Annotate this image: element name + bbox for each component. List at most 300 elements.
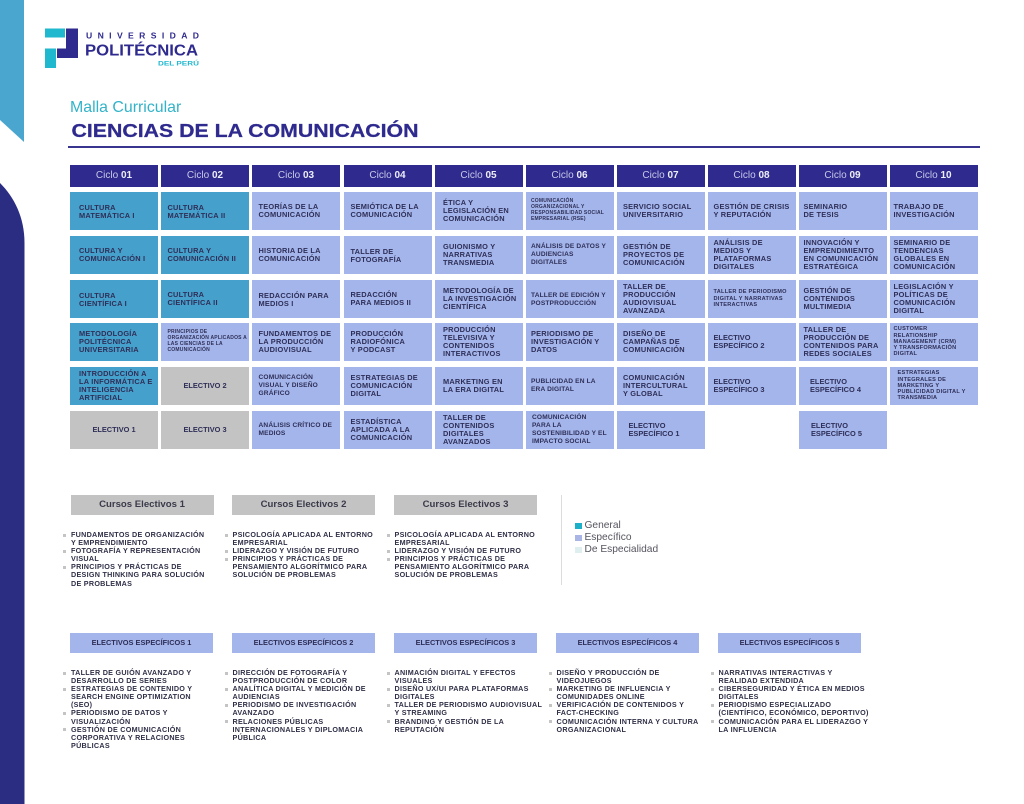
course: CRM: MANAGEMENT (CRM) bbox=[894, 339, 956, 345]
heading: Cursos Electivos 3 bbox=[394, 495, 537, 515]
heading: Cursos Electivos 3: Cursos Electivos 3 bbox=[423, 499, 508, 510]
course: CRM bbox=[890, 323, 978, 361]
course: Servicio Social Universitario: SERVICIO SOCIAL bbox=[623, 202, 691, 211]
course: Gestión de Crisis: GESTIÓN DE CRISIS bbox=[714, 202, 790, 211]
course: Trabajo de Investigación: TRABAJO DE bbox=[894, 202, 944, 211]
list: Electivos Específicos 5 bbox=[711, 668, 869, 734]
course: Análisis de Datos bbox=[526, 236, 614, 274]
course: Cultura y Comunicación II: COMUNICACIÓN II bbox=[168, 254, 236, 263]
course: Estrategias de Comunicación Digital: COMUNICACIÓN bbox=[350, 381, 412, 390]
course: Seminario de Tesis: DE TESIS bbox=[804, 210, 839, 219]
course: Cultura Matemática I: MATEMÁTICA I bbox=[79, 211, 135, 220]
course: Fundamentos de la Producción bbox=[252, 323, 340, 361]
course: Cultura Científica I bbox=[70, 280, 158, 318]
course: Marketing en la Era Digital bbox=[434, 367, 522, 405]
course: Fundamentos de la Producción: AUDIOVISUAL bbox=[258, 345, 312, 354]
heading: Cursos Electivos 1 bbox=[70, 495, 214, 515]
course: Ética y Legislación: ÉTICA Y bbox=[443, 198, 473, 207]
legend: General: General bbox=[584, 520, 621, 530]
course: Estadística Aplicada: APLICADA A LA bbox=[350, 425, 410, 434]
course: Gestión de Contenidos: MULTIMEDIA bbox=[804, 302, 852, 311]
list: Cursos Electivos 3: PSICOLOGÍA APLICADA AL ENTORNO bbox=[394, 530, 535, 539]
course: Redacción para Medios II: REDACCIÓN bbox=[350, 290, 397, 299]
course: Electivo Específico 1: ELECTIVO bbox=[628, 421, 665, 430]
decorative side band: navy bbox=[0, 183, 24, 804]
course: Electivo Específico 5: ESPECÍFICO 5 bbox=[811, 429, 862, 438]
course: Electivo Específico 2: ELECTIVO bbox=[714, 333, 750, 342]
course: Teorías de la Comunicación bbox=[252, 192, 340, 230]
course: Legislación y Políticas: DIGITAL bbox=[894, 306, 924, 315]
course: Introducción a la Informática: LA INFORMÁTICA E bbox=[79, 377, 153, 386]
course: Taller de Producción Audiovisual: PRODUCCIÓN bbox=[623, 290, 676, 299]
list: Electivos Específicos 1: GESTIÓN DE COMUNICACIÓN bbox=[71, 725, 181, 734]
course: Estadística Aplicada: ESTADÍSTICA bbox=[350, 417, 402, 426]
list: Cursos Electivos 2: LIDERAZGO Y VISIÓN DE FUTURO bbox=[232, 546, 359, 555]
course: Producción Radiofónica: RADIOFÓNICA bbox=[350, 337, 405, 346]
heading: Electivos Específicos 2: ELECTIVOS ESPECÍFICOS 2 bbox=[254, 638, 353, 647]
course: Semiótica de la Comunicación bbox=[344, 192, 432, 230]
header: Ciclo 01 bbox=[70, 165, 158, 186]
list: Cursos Electivos 3: PENSAMIENTO ALGORÍTMICO PARA bbox=[394, 562, 529, 571]
header: Ciclo 07 bbox=[616, 165, 704, 186]
list: Electivos Específicos 2: POSTPRODUCCIÓN DE COLOR bbox=[232, 676, 347, 685]
list: Electivos Específicos 4: VERIFICACIÓN DE CONTENIDOS Y bbox=[556, 700, 684, 709]
list: Electivos Específicos 1: PERIODISMO DE DATOS Y bbox=[71, 708, 168, 717]
course: Cultura y Comunicación I bbox=[70, 236, 158, 274]
course: Cultura Científica I: CIENTÍFICA I bbox=[79, 299, 127, 308]
header: Ciclo 09 bbox=[798, 165, 886, 186]
course: Cultura y Comunicación I: COMUNICACIÓN I bbox=[79, 254, 145, 263]
course: Taller de Fotografía: TALLER DE bbox=[350, 247, 393, 256]
course: Cultura Matemática II: CULTURA bbox=[168, 203, 204, 212]
course: Legislación y Políticas: COMUNICACIÓN bbox=[894, 298, 955, 307]
heading: Electivos Específicos 5 bbox=[718, 633, 861, 652]
list: Cursos Electivos 1 bbox=[63, 530, 205, 588]
course: Redacción para Medios I bbox=[252, 280, 340, 318]
course: Comunicación Organizacional y RSE: COMUNICACIÓN bbox=[531, 198, 573, 204]
header: Ciclo 06: Ciclo 06 bbox=[551, 170, 588, 181]
list: Electivos Específicos 5: NARRATIVAS INTERACTIVAS Y bbox=[718, 668, 833, 677]
list: Electivos Específicos 3: TALLER DE PERIODISMO AUDIOVISUAL bbox=[394, 700, 542, 709]
course: Comunicación Organizacional y RSE: RESPONSABILIDAD SOCIAL bbox=[531, 210, 604, 216]
course: Diseño de Campañas bbox=[616, 323, 704, 361]
course: Trabajo de Investigación bbox=[890, 192, 978, 230]
list: Electivos Específicos 5: CIBERSEGURIDAD Y ÉTICA EN MEDIOS bbox=[718, 684, 865, 693]
list: Electivos Específicos 1: VISUALIZACIÓN bbox=[71, 717, 130, 726]
course: Legislación y Políticas bbox=[890, 280, 978, 318]
course: Taller de Producción Audiovisual: AVANZADA bbox=[623, 306, 665, 315]
list: Cursos Electivos 2: EMPRESARIAL bbox=[232, 538, 288, 547]
list: Electivos Específicos 3: REPUTACIÓN bbox=[394, 725, 444, 734]
legend: De Especialidad: De Especialidad bbox=[584, 544, 658, 554]
list: Cursos Electivos 3: PRINCIPIOS Y PRÁCTICAS DE bbox=[394, 554, 505, 563]
course: Estrategias Integrales: MARKETING Y bbox=[898, 383, 939, 389]
course: Gestión de Proyectos: PROYECTOS DE bbox=[623, 250, 684, 259]
legend: Específico: Específico bbox=[584, 532, 632, 542]
list: Electivos Específicos 4: MARKETING DE INFLUENCIA Y bbox=[556, 684, 671, 693]
list: Electivos Específicos 1: PÚBLICAS bbox=[71, 741, 110, 750]
course: Análisis de Medios: DIGITALES bbox=[714, 262, 754, 271]
course: Guionismo y Narrativas: NARRATIVAS bbox=[443, 250, 493, 259]
header: Ciclo 01: Ciclo 01 bbox=[96, 170, 132, 181]
list: Electivos Específicos 2: PÚBLICA bbox=[232, 733, 266, 742]
course: Seminario de Tendencias: COMUNICACIÓN bbox=[894, 262, 955, 271]
course: Producción Televisiva bbox=[434, 323, 522, 361]
header: Ciclo 10 bbox=[890, 165, 978, 186]
course: CRM: CUSTOMER bbox=[894, 326, 927, 332]
course: Introducción a la Informática: ARTIFICIAL bbox=[79, 393, 122, 402]
course: Estrategias de Comunicación Digital: ESTRATEGIAS DE bbox=[350, 373, 418, 382]
course: Marketing en la Era Digital: LA ERA DIGITAL bbox=[443, 385, 504, 394]
course: Comunicación Visual: VISUAL Y DISEÑO bbox=[258, 382, 318, 389]
course: Electivo Específico 3: ELECTIVO bbox=[714, 377, 750, 386]
course: Electivo Específico 2: ESPECÍFICO 2 bbox=[714, 341, 764, 350]
course: Taller de Edición: TALLER DE EDICIÓN Y bbox=[531, 292, 606, 299]
course: Análisis de Medios: PLATAFORMAS bbox=[714, 254, 771, 263]
course: Producción Televisiva: TELEVISIVA Y bbox=[443, 333, 495, 342]
course: Electivo 2 bbox=[161, 367, 249, 405]
list: Electivos Específicos 2: PERIODISMO DE INVESTIGACIÓN bbox=[232, 700, 356, 709]
course: Taller de Producción para Redes: PRODUCCIÓN DE bbox=[804, 333, 869, 342]
list: Electivos Específicos 1 bbox=[63, 668, 192, 750]
heading: Electivos Específicos 4 bbox=[556, 633, 699, 652]
course: Comunicación Organizacional y RSE: ORGANIZACIONAL Y bbox=[531, 204, 585, 210]
course: Taller de Producción para Redes: CONTENIDOS PARA bbox=[804, 341, 879, 350]
course: Gestión de Contenidos: CONTENIDOS bbox=[804, 294, 855, 303]
course: Comunicación Visual: COMUNICACIÓN bbox=[258, 374, 313, 381]
header: Ciclo 03: Ciclo 03 bbox=[278, 170, 314, 181]
course: Gestión de Proyectos bbox=[616, 236, 704, 274]
course: Introducción a la Informática bbox=[70, 367, 158, 405]
list: Electivos Específicos 3: ANIMACIÓN DIGITAL Y EFECTOS bbox=[394, 668, 516, 677]
course: Comunicación Intercultural bbox=[616, 367, 704, 405]
subtitle: Malla Curricular bbox=[70, 99, 181, 116]
course: Comunicación Intercultural: COMUNICACIÓN bbox=[623, 373, 685, 382]
course: Estrategias Integrales: TRANSMEDIA bbox=[898, 395, 937, 401]
course: Innovación y Emprendimiento: ESTRATÉGICA bbox=[804, 262, 858, 271]
list: Electivos Específicos 2: ANALÍTICA DIGITAL Y MEDICIÓN DE bbox=[232, 684, 366, 693]
course: Historia de la Comunicación: HISTORIA DE LA bbox=[258, 246, 321, 255]
course: Taller de Periodismo Digital: TALLER DE PERIODISMO bbox=[714, 289, 787, 295]
heading: Cursos Electivos 2: Cursos Electivos 2 bbox=[261, 499, 346, 510]
list: Cursos Electivos 2: PSICOLOGÍA APLICADA AL ENTORNO bbox=[232, 530, 373, 539]
list: Electivos Específicos 3: VISUALES bbox=[394, 676, 433, 685]
header: Ciclo 10: Ciclo 10 bbox=[915, 170, 952, 181]
course: Guionismo y Narrativas bbox=[434, 236, 522, 274]
course: Cultura Científica I: CULTURA bbox=[79, 291, 116, 300]
heading: Cursos Electivos 2 bbox=[232, 495, 375, 515]
course: Seminario de Tendencias: TENDENCIAS bbox=[894, 246, 944, 255]
course: Estrategias Integrales: ESTRATEGIAS bbox=[898, 370, 940, 376]
course: Cultura y Comunicación I: CULTURA Y bbox=[79, 246, 123, 255]
list: Electivos Específicos 4: FACT-CHECKING bbox=[556, 708, 619, 717]
heading: Electivos Específicos 3: ELECTIVOS ESPECÍFICOS 3 bbox=[416, 638, 515, 647]
course: Electivo Específico 2 bbox=[708, 323, 796, 361]
course: Estrategias Integrales bbox=[890, 367, 978, 405]
list: Electivos Específicos 4: COMUNIDADES ONLINE bbox=[556, 692, 645, 701]
course: Gestión de Proyectos: GESTIÓN DE bbox=[623, 242, 671, 251]
list: Electivos Específicos 5: LA INFLUENCIA bbox=[718, 725, 777, 734]
list: Cursos Electivos 3: EMPRESARIAL bbox=[394, 538, 450, 547]
course: Cultura Matemática II: MATEMÁTICA II bbox=[168, 211, 225, 220]
course: Comunicación Intercultural: INTERCULTURAL bbox=[623, 381, 688, 390]
course: Principios de Organización: PRINCIPIOS DE bbox=[168, 329, 207, 335]
course: Comunicación Organizacional y RSE bbox=[526, 192, 614, 230]
course: Publicidad en la Era Digital: PUBLICIDAD EN LA bbox=[531, 378, 596, 385]
course: Gestión de Contenidos bbox=[798, 280, 886, 318]
course: Guionismo y Narrativas: TRANSMEDIA bbox=[443, 258, 494, 267]
course: Taller de Periodismo Digital bbox=[708, 280, 796, 318]
header: Ciclo 08 bbox=[708, 165, 796, 186]
course: Innovación y Emprendimiento: INNOVACIÓN Y bbox=[804, 238, 860, 247]
course: Teorías de la Comunicación: TEORÍAS DE LA bbox=[258, 202, 318, 211]
header: Ciclo 06 bbox=[526, 165, 614, 186]
header: Ciclo 04 bbox=[344, 165, 432, 186]
heading: Electivos Específicos 5: ELECTIVOS ESPECÍFICOS 5 bbox=[740, 638, 839, 647]
course: Taller de Fotografía: FOTOGRAFÍA bbox=[350, 255, 401, 264]
heading: Electivos Específicos 4: ELECTIVOS ESPECÍFICOS 4 bbox=[578, 638, 677, 647]
course: Redacción para Medios II: PARA MEDIOS II bbox=[350, 298, 411, 307]
course: Diseño de Campañas: DISEÑO DE bbox=[623, 329, 666, 338]
course: Cultura Científica II: CIENTÍFICA II bbox=[168, 298, 218, 307]
list: Cursos Electivos 3: LIDERAZGO Y VISIÓN DE FUTURO bbox=[394, 546, 521, 555]
heading: Cursos Electivos 1: Cursos Electivos 1 bbox=[99, 499, 185, 510]
course: Historia de la Comunicación: COMUNICACIÓN bbox=[258, 254, 320, 263]
course: Análisis de Medios: ANÁLISIS DE bbox=[714, 238, 763, 247]
header: Ciclo 04: Ciclo 04 bbox=[369, 170, 406, 181]
list: Electivos Específicos 2: RELACIONES PÚBLICAS bbox=[232, 717, 324, 726]
course: Principios de Organización: LAS CIENCIAS DE LA bbox=[168, 341, 223, 347]
header: Ciclo 05: Ciclo 05 bbox=[460, 170, 497, 181]
list: Electivos Específicos 1: CORPORATIVA Y RELACIONES bbox=[71, 733, 185, 742]
header: Ciclo 02: Ciclo 02 bbox=[187, 170, 223, 181]
list: Cursos Electivos 3 bbox=[387, 530, 535, 579]
list: Electivos Específicos 1: (SEO) bbox=[71, 700, 92, 709]
course: Cultura Científica II bbox=[161, 280, 249, 318]
list: Electivos Específicos 5: REALIDAD EXTENDIDA bbox=[718, 676, 804, 685]
course: Cultura Matemática I bbox=[70, 192, 158, 230]
header: Ciclo 09: Ciclo 09 bbox=[824, 170, 861, 181]
course: Electivo Específico 4 bbox=[798, 367, 886, 405]
course: Legislación y Políticas: POLÍTICAS DE bbox=[894, 290, 948, 299]
course: Análisis Crítico de Medios bbox=[252, 411, 340, 449]
course: Fundamentos de la Producción: FUNDAMENTOS DE bbox=[258, 329, 331, 338]
course: Seminario de Tendencias: SEMINARIO DE bbox=[894, 238, 950, 247]
course: Electivo 3: ELECTIVO 3 bbox=[183, 425, 227, 434]
list: Electivos Específicos 1: DESARROLLO DE SERIES bbox=[71, 676, 167, 685]
list: Cursos Electivos 1: DESIGN THINKING PARA SOLUCIÓN bbox=[71, 570, 205, 579]
decorative side band: light blue ribbon bbox=[0, 0, 24, 142]
list: Cursos Electivos 1: DE PROBLEMAS bbox=[71, 579, 132, 588]
list: Cursos Electivos 1: PRINCIPIOS Y PRÁCTICAS DE bbox=[71, 562, 182, 571]
list: Electivos Específicos 5: (CIENTÍFICO, ECONÓMICO, DEPORTIVO) bbox=[718, 708, 869, 717]
list: Cursos Electivos 2 bbox=[225, 530, 373, 579]
course: Taller de Producción Audiovisual bbox=[616, 280, 704, 318]
list: Cursos Electivos 2: SOLUCIÓN DE PROBLEMAS bbox=[232, 570, 336, 579]
course: Electivo 3 bbox=[161, 411, 249, 449]
course: Análisis de Datos: ANÁLISIS DE DATOS Y bbox=[531, 243, 606, 250]
course: Principios de Organización: ORGANIZACIÓN APLICADOS A bbox=[168, 335, 247, 341]
course: Ética y Legislación bbox=[434, 192, 522, 230]
course: Marketing en la Era Digital: MARKETING EN bbox=[443, 377, 503, 386]
course: CRM: RELATIONSHIP bbox=[894, 333, 938, 339]
course: Comunicación para la Sostenibilidad: SOSTENIBILIDAD Y EL bbox=[532, 430, 607, 437]
course: Taller de Producción para Redes bbox=[798, 323, 886, 361]
course: Semiótica de la Comunicación: SEMIÓTICA DE LA bbox=[350, 202, 419, 211]
course: Comunicación para la Sostenibilidad: IMPACTO SOCIAL bbox=[532, 438, 591, 445]
course: Periodismo de Investigación: INVESTIGACIÓN Y bbox=[531, 337, 599, 346]
course: Comunicación Organizacional y RSE: EMPRESARIAL (RSE) bbox=[531, 216, 586, 222]
course: Servicio Social Universitario bbox=[616, 192, 704, 230]
course: Electivo Específico 4: ESPECÍFICO 4 bbox=[810, 385, 861, 394]
course: Seminario de Tendencias bbox=[890, 236, 978, 274]
list: Cursos Electivos 1: Y EMPRENDIMIENTO bbox=[71, 538, 148, 547]
course: Redacción para Medios I: MEDIOS I bbox=[258, 299, 294, 308]
list: Cursos Electivos 1: FUNDAMENTOS DE ORGANIZACIÓN bbox=[71, 530, 204, 539]
course: Metodología de la Investigación: LA INVESTIGACIÓN bbox=[443, 294, 516, 303]
course: Diseño de Campañas: CAMPAÑAS DE bbox=[623, 337, 680, 346]
course: Taller de Producción para Redes: REDES SOCIALES bbox=[804, 349, 872, 358]
course: Comunicación para la Sostenibilidad: PARA LA bbox=[532, 422, 562, 429]
course: Metodología Politécnica bbox=[70, 323, 158, 361]
list: Cursos Electivos 2: PRINCIPIOS Y PRÁCTICAS DE bbox=[232, 554, 343, 563]
course: Análisis de Datos: DIGITALES bbox=[531, 259, 567, 266]
course: Legislación y Políticas: LEGISLACIÓN Y bbox=[894, 282, 954, 290]
course: CRM: Y TRANSFORMACIÓN bbox=[894, 345, 956, 351]
logo: Universidad Politécnica del Perú: DEL PERÚ bbox=[158, 58, 199, 68]
course: Periodismo de Investigación: PERIODISMO DE bbox=[531, 329, 593, 338]
list: Electivos Específicos 2 bbox=[225, 668, 366, 742]
course: Introducción a la Informática: INTELIGENCIA bbox=[79, 385, 134, 394]
course: Producción Radiofónica: Y PODCAST bbox=[350, 345, 395, 354]
course: Metodología de la Investigación bbox=[434, 280, 522, 318]
course: Seminario de Tesis bbox=[798, 192, 886, 230]
course: Principios de Organización: COMUNICACIÓN bbox=[168, 347, 210, 353]
course: Electivo Específico 3: ESPECÍFICO 3 bbox=[714, 385, 764, 394]
course: Ética y Legislación: COMUNICACIÓN bbox=[443, 214, 505, 223]
course: Electivo Específico 4: ELECTIVO bbox=[810, 377, 847, 386]
course: Taller de Producción Audiovisual: TALLER DE bbox=[623, 282, 666, 290]
course: Estrategias Integrales: INTEGRALES DE bbox=[898, 377, 946, 383]
course: Taller de Periodismo Digital: DIGITAL Y NARRATIVAS bbox=[714, 296, 783, 302]
course: Gestión de Contenidos: GESTIÓN DE bbox=[804, 286, 851, 295]
list: Electivos Específicos 1: TALLER DE GUIÓN AVANZADO Y bbox=[71, 668, 191, 677]
course: Electivo Específico 1: ESPECÍFICO 1 bbox=[628, 429, 679, 438]
list: Electivos Específicos 4: ORGANIZACIONAL bbox=[556, 725, 626, 734]
course: Electivo Específico 5: ELECTIVO bbox=[811, 421, 848, 430]
course: Fundamentos de la Producción: LA PRODUCCIÓN bbox=[258, 337, 324, 346]
course: Estrategias Integrales: PUBLICIDAD DIGITAL Y bbox=[898, 389, 966, 395]
course: Cultura Matemática I: CULTURA bbox=[79, 203, 116, 212]
course: Taller de Contenidos Digitales: CONTENIDOS bbox=[443, 421, 494, 430]
course: Seminario de Tesis: SEMINARIO bbox=[804, 202, 847, 211]
logo: Universidad Politécnica del Perú: UNIVERSIDAD bbox=[86, 30, 199, 40]
course: Cultura Matemática II bbox=[161, 192, 249, 230]
course: Cultura Científica II: CULTURA bbox=[168, 290, 204, 299]
course: Taller de Producción para Redes: TALLER DE bbox=[804, 325, 846, 334]
course: Guionismo y Narrativas: GUIONISMO Y bbox=[443, 242, 495, 251]
course: Electivo 1 bbox=[70, 411, 158, 449]
list: Electivos Específicos 5: PERIODISMO ESPECIALIZADO bbox=[718, 700, 831, 709]
course: Periodismo de Investigación: DATOS bbox=[531, 345, 557, 354]
course: Comunicación Visual: GRÁFICO bbox=[258, 390, 290, 397]
list: Electivos Específicos 3: Y STREAMING bbox=[394, 708, 447, 717]
list: Cursos Electivos 2: PENSAMIENTO ALGORÍTMICO PARA bbox=[232, 562, 367, 571]
course: Publicidad en la Era Digital bbox=[526, 367, 614, 405]
course: Gestión de Crisis: Y REPUTACIÓN bbox=[714, 210, 771, 219]
list: Cursos Electivos 1: VISUAL bbox=[71, 554, 99, 563]
course: Trabajo de Investigación: INVESTIGACIÓN bbox=[894, 210, 955, 219]
course: Análisis Crítico de Medios: ANÁLISIS CRÍTICO DE bbox=[258, 422, 332, 429]
course: Ética y Legislación: LEGISLACIÓN EN bbox=[443, 206, 509, 215]
logo: Universidad Politécnica del Perú: POLITÉCNICA bbox=[85, 42, 198, 60]
course: Cultura y Comunicación II: CULTURA Y bbox=[168, 246, 211, 255]
list: Electivos Específicos 4 bbox=[549, 668, 698, 734]
list: Electivos Específicos 3 bbox=[387, 668, 542, 734]
course: Taller de Producción Audiovisual: AUDIOVISUAL bbox=[623, 298, 676, 307]
logo: Universidad Politécnica del Perú bbox=[45, 28, 199, 68]
course: Redacción para Medios II bbox=[344, 280, 432, 318]
course: Taller de Periodismo Digital: INTERACTIVAS bbox=[714, 302, 757, 308]
course: Taller de Edición: POSTPRODUCCIÓN bbox=[531, 300, 596, 307]
course: Teorías de la Comunicación: COMUNICACIÓN bbox=[258, 210, 320, 219]
course: Gestión de Crisis bbox=[708, 192, 796, 230]
course: Análisis de Datos: AUDIENCIAS bbox=[531, 251, 574, 258]
course: Periodismo de Investigación bbox=[526, 323, 614, 361]
course: Producción Radiofónica bbox=[344, 323, 432, 361]
heading: Electivos Específicos 3 bbox=[394, 633, 537, 652]
course: Análisis de Medios bbox=[708, 236, 796, 274]
course: Innovación y Emprendimiento bbox=[798, 236, 886, 274]
header: Ciclo 08: Ciclo 08 bbox=[733, 170, 770, 181]
curriculum grid bbox=[70, 165, 978, 449]
heading: Electivos Específicos 2 bbox=[232, 633, 375, 652]
list: Electivos Específicos 4: COMUNICACIÓN INTERNA Y CULTURA bbox=[556, 717, 698, 726]
course: Introducción a la Informática: INTRODUCCIÓN A bbox=[79, 369, 147, 378]
list: Electivos Específicos 1: ESTRATEGIAS DE CONTENIDO Y bbox=[71, 684, 192, 693]
course: Publicidad en la Era Digital: ERA DIGITAL bbox=[531, 386, 574, 393]
course: Estrategias de Comunicación Digital bbox=[344, 367, 432, 405]
course: Diseño de Campañas: COMUNICACIÓN bbox=[623, 345, 685, 354]
heading: Electivos Específicos 1: ELECTIVOS ESPECÍFICOS 1 bbox=[92, 638, 191, 647]
course: Innovación y Emprendimiento: EN COMUNICACIÓN bbox=[804, 254, 878, 263]
course: Electivo 2: ELECTIVO 2 bbox=[183, 381, 227, 390]
course: Electivo Específico 1 bbox=[616, 411, 704, 449]
course: Taller de Fotografía bbox=[344, 236, 432, 274]
heading: Electivos Específicos 1 bbox=[70, 633, 213, 652]
course: Taller de Contenidos Digitales: DIGITALES bbox=[443, 429, 484, 438]
list: Electivos Específicos 3: DIGITALES bbox=[394, 692, 435, 701]
header: Ciclo 02 bbox=[161, 165, 249, 186]
course: Estadística Aplicada: COMUNICACIÓN bbox=[350, 433, 412, 442]
course: Producción Televisiva: PRODUCCIÓN bbox=[443, 325, 496, 334]
course: Taller de Contenidos Digitales: AVANZADOS bbox=[443, 437, 491, 446]
list: Electivos Específicos 1: SEARCH ENGINE OPTIMIZATION bbox=[71, 692, 191, 701]
list: Cursos Electivos 1: FOTOGRAFÍA Y REPRESENTACIÓN bbox=[71, 546, 200, 555]
course: Metodología Politécnica: POLITÉCNICA bbox=[79, 337, 132, 346]
course: Principios de Organización bbox=[161, 323, 249, 361]
course: Comunicación para la Sostenibilidad bbox=[526, 411, 614, 449]
course: Semiótica de la Comunicación: COMUNICACIÓN bbox=[350, 210, 412, 219]
course: Comunicación Visual bbox=[252, 367, 340, 405]
list: Electivos Específicos 2: DIRECCIÓN DE FOTOGRAFÍA Y bbox=[232, 668, 347, 677]
course: Electivo 1: ELECTIVO 1 bbox=[92, 425, 136, 434]
list: Electivos Específicos 5: DIGITALES bbox=[718, 692, 759, 701]
list: Electivos Específicos 4: VIDEOJUEGOS bbox=[556, 676, 612, 685]
course: Historia de la Comunicación bbox=[252, 236, 340, 274]
list: Cursos Electivos 3: SOLUCIÓN DE PROBLEMAS bbox=[394, 570, 498, 579]
course: CRM: DIGITAL bbox=[894, 351, 917, 357]
